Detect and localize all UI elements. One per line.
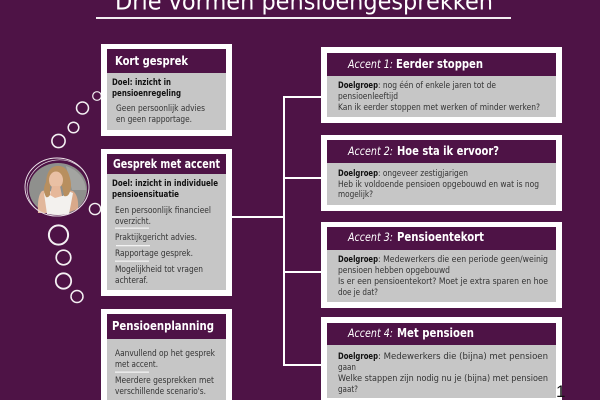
panel: Gesprek met accent: Praktijkgericht advies. bbox=[115, 232, 197, 242]
panel: Accent 3: : Medewerkers die een periode geen/weinig bbox=[378, 254, 548, 264]
panel: Accent 2: mogelijk? bbox=[338, 189, 373, 199]
panel: Accent 1: Eerder stoppen bbox=[396, 57, 483, 71]
panel: Accent 1: Doelgroep bbox=[338, 80, 378, 90]
panel: Kort gesprek: Kort gesprek bbox=[115, 54, 189, 68]
panel: Kort gesprek: Doel: inzicht in bbox=[112, 77, 171, 87]
panel: Pensioenplanning: verschillende scenario's. bbox=[115, 386, 206, 396]
panel: Kort gesprek: pensioenregeling bbox=[112, 88, 181, 98]
panel: Gesprek met accent: Gesprek met accent bbox=[113, 157, 220, 171]
panel: Kort gesprek: Geen persoonlijk advies bbox=[116, 103, 205, 113]
panel: Accent 1: pensioenleeftijd bbox=[338, 91, 398, 101]
connector lines bbox=[232, 96, 321, 366]
panel: Accent 4: Met pensioen bbox=[397, 326, 474, 340]
panel: Pensioenplanning: met accent. bbox=[115, 359, 158, 369]
panel: Gesprek met accent: Doel: inzicht in individuele bbox=[112, 178, 218, 188]
panel: Accent 3: Pensioentekort bbox=[397, 230, 484, 244]
panel: Accent 4: Doelgroep bbox=[338, 351, 378, 361]
panel: Gesprek met accent bbox=[101, 149, 232, 296]
panel: Kort gesprek: en geen rapportage. bbox=[116, 114, 192, 124]
panel: Accent 4: gaat? bbox=[338, 384, 358, 394]
panel: Accent 2: Doelgroep bbox=[338, 168, 378, 178]
panel: Gesprek met accent: Mogelijkheid tot vragen bbox=[115, 264, 203, 274]
panel: Accent 2: : ongeveer zestigjarigen bbox=[378, 168, 468, 178]
panel: Accent 2: Heb ik voldoende pensioen opgebouwd en wat is nog bbox=[338, 179, 539, 189]
panel: Accent 2: Accent 2: bbox=[347, 144, 393, 158]
panel: Gesprek met accent: Rapportage gesprek. bbox=[115, 248, 193, 258]
panel: Gesprek met accent: Een persoonlijk financieel bbox=[115, 205, 211, 215]
panel: Pensioenplanning: Pensioenplanning bbox=[112, 319, 214, 333]
panel: Accent 4: Accent 4: bbox=[347, 326, 393, 340]
panel: Accent 3 bbox=[321, 222, 562, 308]
panel: Accent 3: Is er een pensioentekort? Moet je extra sparen en hoe bbox=[338, 276, 548, 286]
panel: Pensioenplanning: Aanvullend op het gesprek bbox=[115, 348, 215, 358]
panel: Accent 3: pensioen hebben opgebouwd bbox=[338, 265, 450, 275]
icon: thought bubbles bbox=[49, 92, 101, 302]
icon: portrait photo bbox=[22, 154, 94, 222]
panel: Pensioenplanning: Meerdere gesprekken met bbox=[115, 375, 215, 385]
panel: Accent 4: Welke stappen zijn nodig nu je (bijna) met pensioen bbox=[338, 373, 548, 383]
panel: Accent 1: Accent 1: bbox=[347, 57, 393, 71]
panel: Accent 2: Hoe sta ik ervoor? bbox=[397, 144, 499, 158]
panel: Gesprek met accent: achteraf. bbox=[115, 275, 148, 285]
panel: Accent 1 bbox=[321, 47, 562, 123]
panel: Accent 3: Doelgroep bbox=[338, 254, 378, 264]
panel: Gesprek met accent: overzicht. bbox=[115, 216, 151, 226]
panel: Accent 4 bbox=[321, 317, 562, 400]
panel: Gesprek met accent: pensioensituatie bbox=[112, 189, 179, 199]
panel: Accent 1: Kan ik eerder stoppen met werken of minder werken? bbox=[338, 102, 540, 112]
panel: Pensioenplanning bbox=[101, 309, 232, 400]
panel: Accent 2 bbox=[321, 135, 562, 211]
panel: Accent 4: gaan bbox=[338, 362, 356, 372]
panel: Accent 3: Accent 3: bbox=[347, 230, 393, 244]
panel: Accent 3: doe je dat? bbox=[338, 287, 378, 297]
panel: Accent 4: : Medewerkers die (bijna) met pensioen bbox=[378, 351, 548, 361]
panel: Accent 1: : nog één of enkele jaren tot de bbox=[378, 80, 496, 90]
panel: Kort gesprek bbox=[101, 44, 232, 136]
